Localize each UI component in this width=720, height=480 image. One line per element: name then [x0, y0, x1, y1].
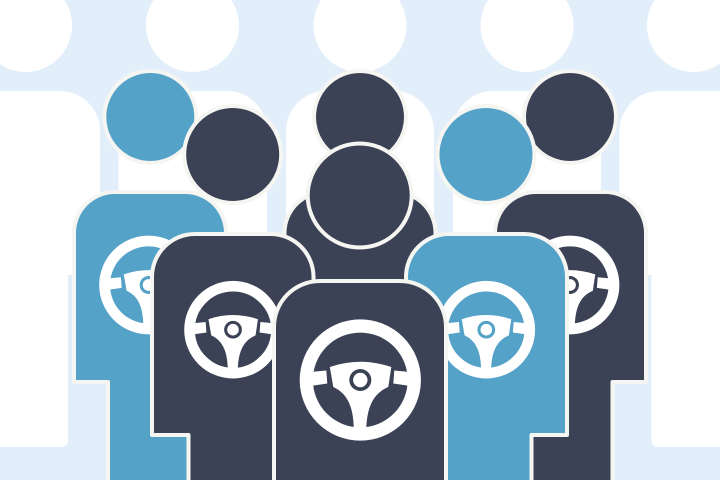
figure: front centre dark driver: [274, 144, 446, 480]
figure: back centre dark driver: [284, 71, 436, 480]
figure: middle left dark driver: [152, 106, 314, 480]
figure: middle right blue driver: [406, 106, 567, 480]
figure: back left blue driver: [74, 71, 226, 480]
figure: back right dark driver: [495, 71, 646, 480]
